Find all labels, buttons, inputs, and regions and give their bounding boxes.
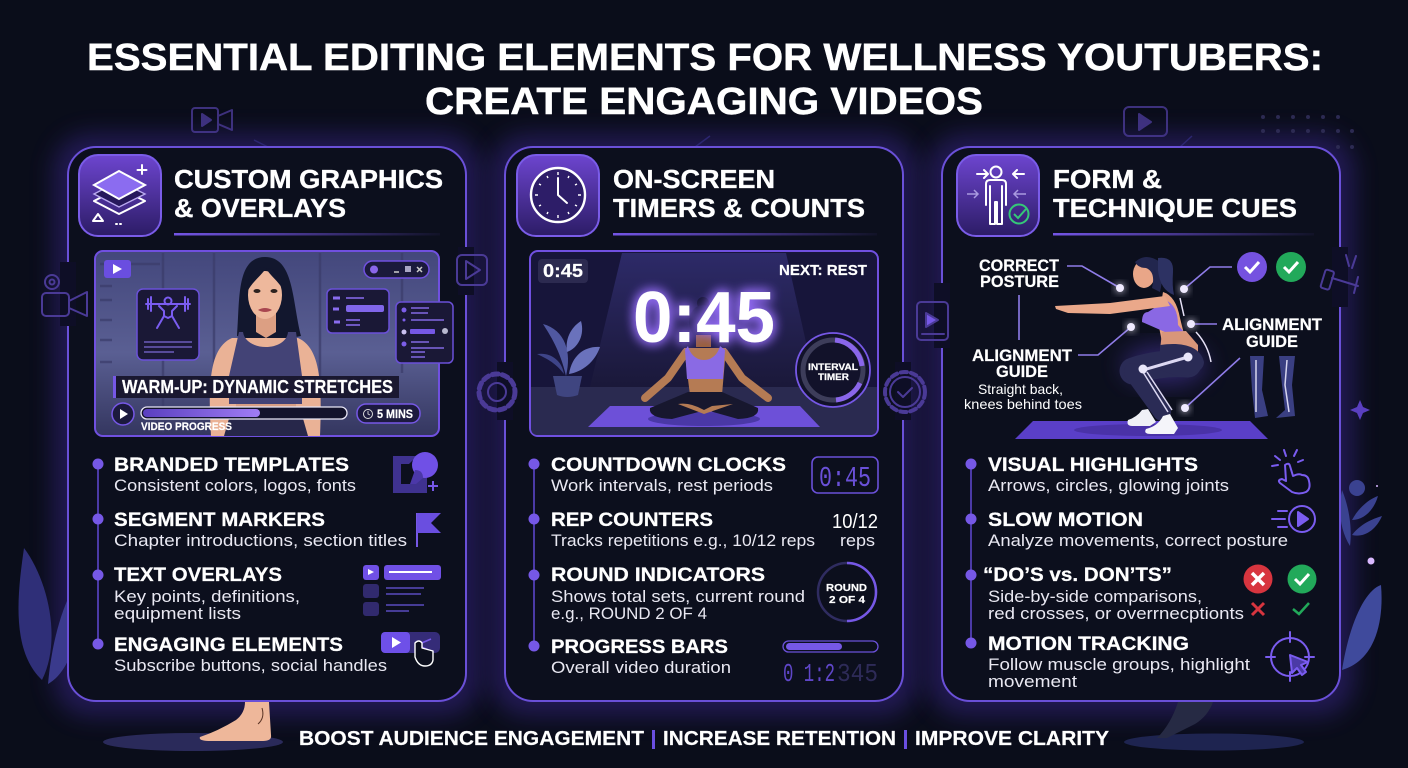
icon: dumbbell <box>1320 255 1358 293</box>
callout: alignment guide right: GUIDE <box>1246 333 1298 351</box>
item: engaging elements <box>114 634 387 675</box>
title <box>87 37 1323 123</box>
icon: leg alignment <box>1250 356 1295 418</box>
heading: TIMERS & COUNTS <box>613 195 865 223</box>
feature list <box>92 454 407 675</box>
video progress bar <box>112 403 347 433</box>
footer tagline: INCREASE RETENTION <box>663 728 896 750</box>
woman presenter <box>210 257 321 436</box>
item: segment markers: SEGMENT MARKERS <box>114 509 325 531</box>
squatting woman <box>1055 257 1207 434</box>
icon: dos and donts marks <box>1244 564 1316 615</box>
rep count <box>832 511 878 550</box>
panel frame <box>68 147 466 701</box>
interval timer: TIMER <box>818 372 850 382</box>
item: slow motion: SLOW MOTION <box>988 509 1143 531</box>
icon: motion tracking target <box>1266 632 1314 681</box>
squat illustration <box>964 252 1322 439</box>
footer tagline <box>299 728 1110 750</box>
timer chip: 0:45 <box>543 261 583 281</box>
panel: custom graphics <box>60 147 474 701</box>
back alignment curve <box>1180 298 1211 362</box>
icon: tap hand <box>1272 450 1310 494</box>
icon: layers <box>79 155 161 236</box>
icon: gear check <box>885 372 925 412</box>
callout: correct posture: POSTURE <box>980 273 1059 291</box>
item: rep counters: Tracks repetitions e.g., 10/12 reps <box>551 531 815 550</box>
dot grid decoration <box>1261 115 1354 149</box>
item: motion tracking: Follow muscle groups, highlight <box>988 655 1250 674</box>
video progress bar: VIDEO PROGRESS <box>141 421 232 433</box>
item: round indicators: e.g., ROUND 2 OF 4 <box>551 604 707 623</box>
title: ESSENTIAL EDITING ELEMENTS FOR WELLNESS YOUTUBERS: <box>87 37 1323 79</box>
heading <box>174 166 443 236</box>
yoga mat <box>588 406 820 427</box>
callout: alignment guide left: ALIGNMENT <box>972 347 1072 365</box>
callout: correct posture: CORRECT <box>979 257 1059 275</box>
play badge <box>104 260 131 278</box>
item: branded templates: Consistent colors, logos, fonts <box>114 476 356 495</box>
callout: check marks <box>1180 252 1306 293</box>
settings card <box>327 289 389 333</box>
interval timer <box>796 333 870 407</box>
icon: film camera <box>42 275 87 316</box>
icon: digital clock <box>812 457 878 495</box>
item: slow motion: Analyze movements, correct posture <box>988 531 1288 550</box>
duration chip <box>357 404 420 423</box>
item: dos and donts: red crosses, or overrnecptionts <box>988 604 1244 623</box>
item: slow motion <box>988 509 1288 550</box>
item: text overlays: Key points, definitions, <box>114 587 300 606</box>
item: segment markers: Chapter introductions, section titles <box>114 531 407 550</box>
icon: branded template <box>393 452 438 493</box>
decoration: foot right <box>1124 702 1304 750</box>
heading <box>613 166 877 236</box>
item: text overlays <box>114 564 300 623</box>
item: round indicators: ROUND INDICATORS <box>551 564 765 586</box>
callout: alignment guide right <box>1181 316 1322 412</box>
icon: flag <box>417 513 441 547</box>
item: visual highlights: VISUAL HIGHLIGHTS <box>988 454 1198 476</box>
icon: body alignment <box>957 155 1039 236</box>
icon: round ring: ROUND <box>826 583 867 594</box>
icon: text overlay rows <box>363 565 441 616</box>
icon: gear left <box>479 374 515 410</box>
item: progress bars: PROGRESS BARS <box>551 636 728 658</box>
item: progress bars: Overall video duration <box>551 658 731 677</box>
icon: round ring: 2 OF 4 <box>829 595 866 606</box>
icon: slow motion <box>1272 506 1315 532</box>
icon: progress bar and digits <box>783 641 878 689</box>
callout: correct posture <box>979 257 1124 340</box>
weightlifter card <box>137 289 199 360</box>
icon: video player <box>917 302 948 340</box>
item: dos and donts: Side-by-side comparisons, <box>988 587 1202 606</box>
feature list <box>528 454 815 677</box>
item: engaging elements: Subscribe buttons, social handles <box>114 656 387 675</box>
heading: CUSTOM GRAPHICS <box>174 166 443 194</box>
callout: alignment guide left: GUIDE <box>996 363 1048 381</box>
item: branded templates: BRANDED TEMPLATES <box>114 454 349 476</box>
icon: background video camera <box>192 108 232 132</box>
item: round indicators: Shows total sets, current round <box>551 587 805 606</box>
timer frame <box>530 251 878 436</box>
title: CREATE ENGAGING VIDEOS <box>425 81 983 123</box>
mat <box>1015 421 1268 439</box>
next label: NEXT: REST <box>779 262 867 279</box>
item: motion tracking: MOTION TRACKING <box>988 633 1189 655</box>
interval timer: INTERVAL <box>808 362 859 372</box>
item: progress bars <box>551 636 731 677</box>
item: segment markers <box>114 509 407 550</box>
heading <box>1053 166 1314 236</box>
item: rep counters <box>551 509 815 550</box>
item: countdown clocks: Work intervals, rest periods <box>551 476 773 495</box>
item: countdown clocks <box>551 454 786 495</box>
duration chip: 5 MINS <box>377 409 413 421</box>
video frame <box>95 251 453 436</box>
window controls <box>364 261 429 278</box>
item: rep counters: REP COUNTERS <box>551 509 713 531</box>
icon: digital clock: 0:45 <box>819 462 871 495</box>
decoration: left plant <box>18 548 76 684</box>
decoration: right plants <box>1340 400 1382 670</box>
item: round indicators <box>551 564 805 623</box>
footer tagline: BOOST AUDIENCE ENGAGEMENT <box>299 728 644 750</box>
panel frame <box>505 147 903 701</box>
item: engaging elements: ENGAGING ELEMENTS <box>114 634 343 656</box>
caption bar: WARM-UP: DYNAMIC STRETCHES <box>122 377 393 397</box>
decoration: foot left <box>103 702 283 751</box>
item: visual highlights <box>988 454 1229 495</box>
timer chip <box>538 259 588 283</box>
seated woman <box>645 297 768 426</box>
callout: alignment guide left: knees behind toes <box>964 396 1082 412</box>
heading: ON-SCREEN <box>613 166 775 194</box>
panel frame <box>942 147 1340 701</box>
large timer: 0:45 <box>633 278 775 358</box>
callout: alignment guide right: ALIGNMENT <box>1222 316 1322 334</box>
item: motion tracking: movement <box>988 672 1077 691</box>
item: text overlays: TEXT OVERLAYS <box>114 564 282 586</box>
panel: timers <box>497 147 911 701</box>
item: motion tracking <box>988 633 1250 691</box>
panel: form and technique <box>934 147 1348 701</box>
callout: alignment guide left <box>964 323 1135 412</box>
heading: FORM & <box>1053 166 1162 194</box>
item: dos and donts <box>983 564 1244 623</box>
item: visual highlights: Arrows, circles, glowing joints <box>988 476 1229 495</box>
icon: background play window <box>1124 107 1167 136</box>
icon: progress bar and digits: 345 <box>837 659 878 689</box>
plant <box>537 321 600 397</box>
icon: round ring <box>818 563 876 621</box>
icon: subscribe and cursor <box>381 632 440 666</box>
callout: alignment guide left: Straight back, <box>978 381 1063 397</box>
item: branded templates <box>114 454 356 495</box>
list card <box>396 302 453 363</box>
heading: & OVERLAYS <box>174 195 346 223</box>
icon: progress bar and digits: 0 1:2 <box>783 659 835 689</box>
item: countdown clocks: COUNTDOWN CLOCKS <box>551 454 786 476</box>
icon: play panel <box>457 255 487 285</box>
feature list <box>966 454 1288 691</box>
item: text overlays: equipment lists <box>114 604 241 623</box>
heading: TECHNIQUE CUES <box>1053 195 1297 223</box>
rep count: reps <box>840 531 875 550</box>
footer tagline: IMPROVE CLARITY <box>915 728 1110 750</box>
item: dos and donts: “DO’S vs. DON’TS” <box>983 564 1172 586</box>
icon: clock <box>517 155 599 236</box>
rep count: 10/12 <box>832 511 878 533</box>
